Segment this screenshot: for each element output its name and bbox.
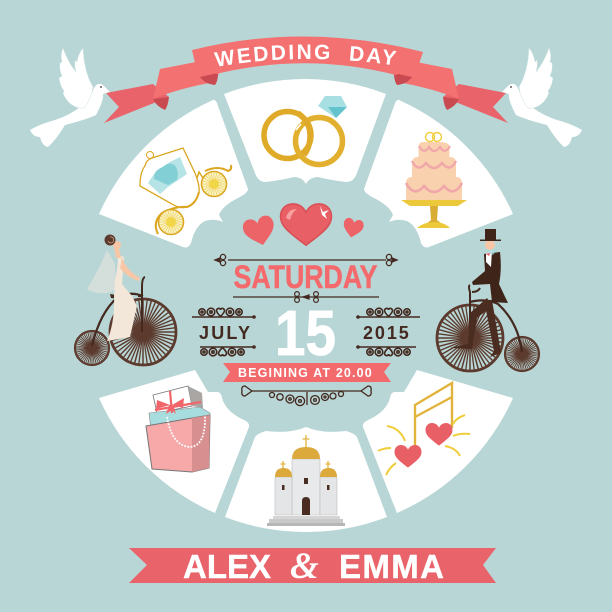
icon: right dove xyxy=(502,48,582,147)
year: 2015: 2015 xyxy=(363,323,411,343)
ornament: july frame xyxy=(192,308,256,356)
groom big wheel xyxy=(434,302,506,374)
ornament: top divider xyxy=(215,254,397,266)
ornament: bottom divider xyxy=(242,386,371,406)
ornament: year frame xyxy=(356,308,420,356)
time text: BEGINING AT 20.00 xyxy=(238,366,373,380)
icon: hearts xyxy=(241,204,365,249)
bride small wheel xyxy=(73,329,111,367)
panel: carriage xyxy=(99,100,248,248)
ornament: middle divider xyxy=(233,292,379,302)
icon: wedding cake xyxy=(401,132,467,228)
names: emma: EMMA xyxy=(339,548,444,585)
icon: gifts xyxy=(146,386,210,472)
top ribbon xyxy=(104,36,508,123)
icon: groom on penny-farthing xyxy=(434,229,541,374)
panel: music xyxy=(363,370,513,513)
panel: rings xyxy=(224,79,386,184)
heading: saturday: SATURDAY xyxy=(234,259,378,295)
ribbon title: wedding day: WEDDING DAY xyxy=(214,44,397,66)
icon: bride on penny-farthing xyxy=(73,234,179,368)
time ribbon xyxy=(223,363,391,382)
bride big wheel xyxy=(107,296,179,368)
date number: 15: 15 xyxy=(275,297,336,369)
icon: left dove xyxy=(30,48,110,147)
panel: church xyxy=(225,427,387,532)
panel: cake xyxy=(364,100,513,248)
panel: gifts xyxy=(99,370,249,513)
ampersand: & xyxy=(290,546,319,587)
bottom names ribbon xyxy=(129,548,496,583)
groom small wheel xyxy=(503,335,541,373)
names: alex: ALEX xyxy=(183,548,271,585)
month: july: JULY xyxy=(199,323,252,343)
icon: church xyxy=(267,435,345,526)
icon: carriage xyxy=(140,148,231,234)
icon: wedding rings xyxy=(264,96,347,164)
icon: music note with hearts xyxy=(378,383,470,475)
